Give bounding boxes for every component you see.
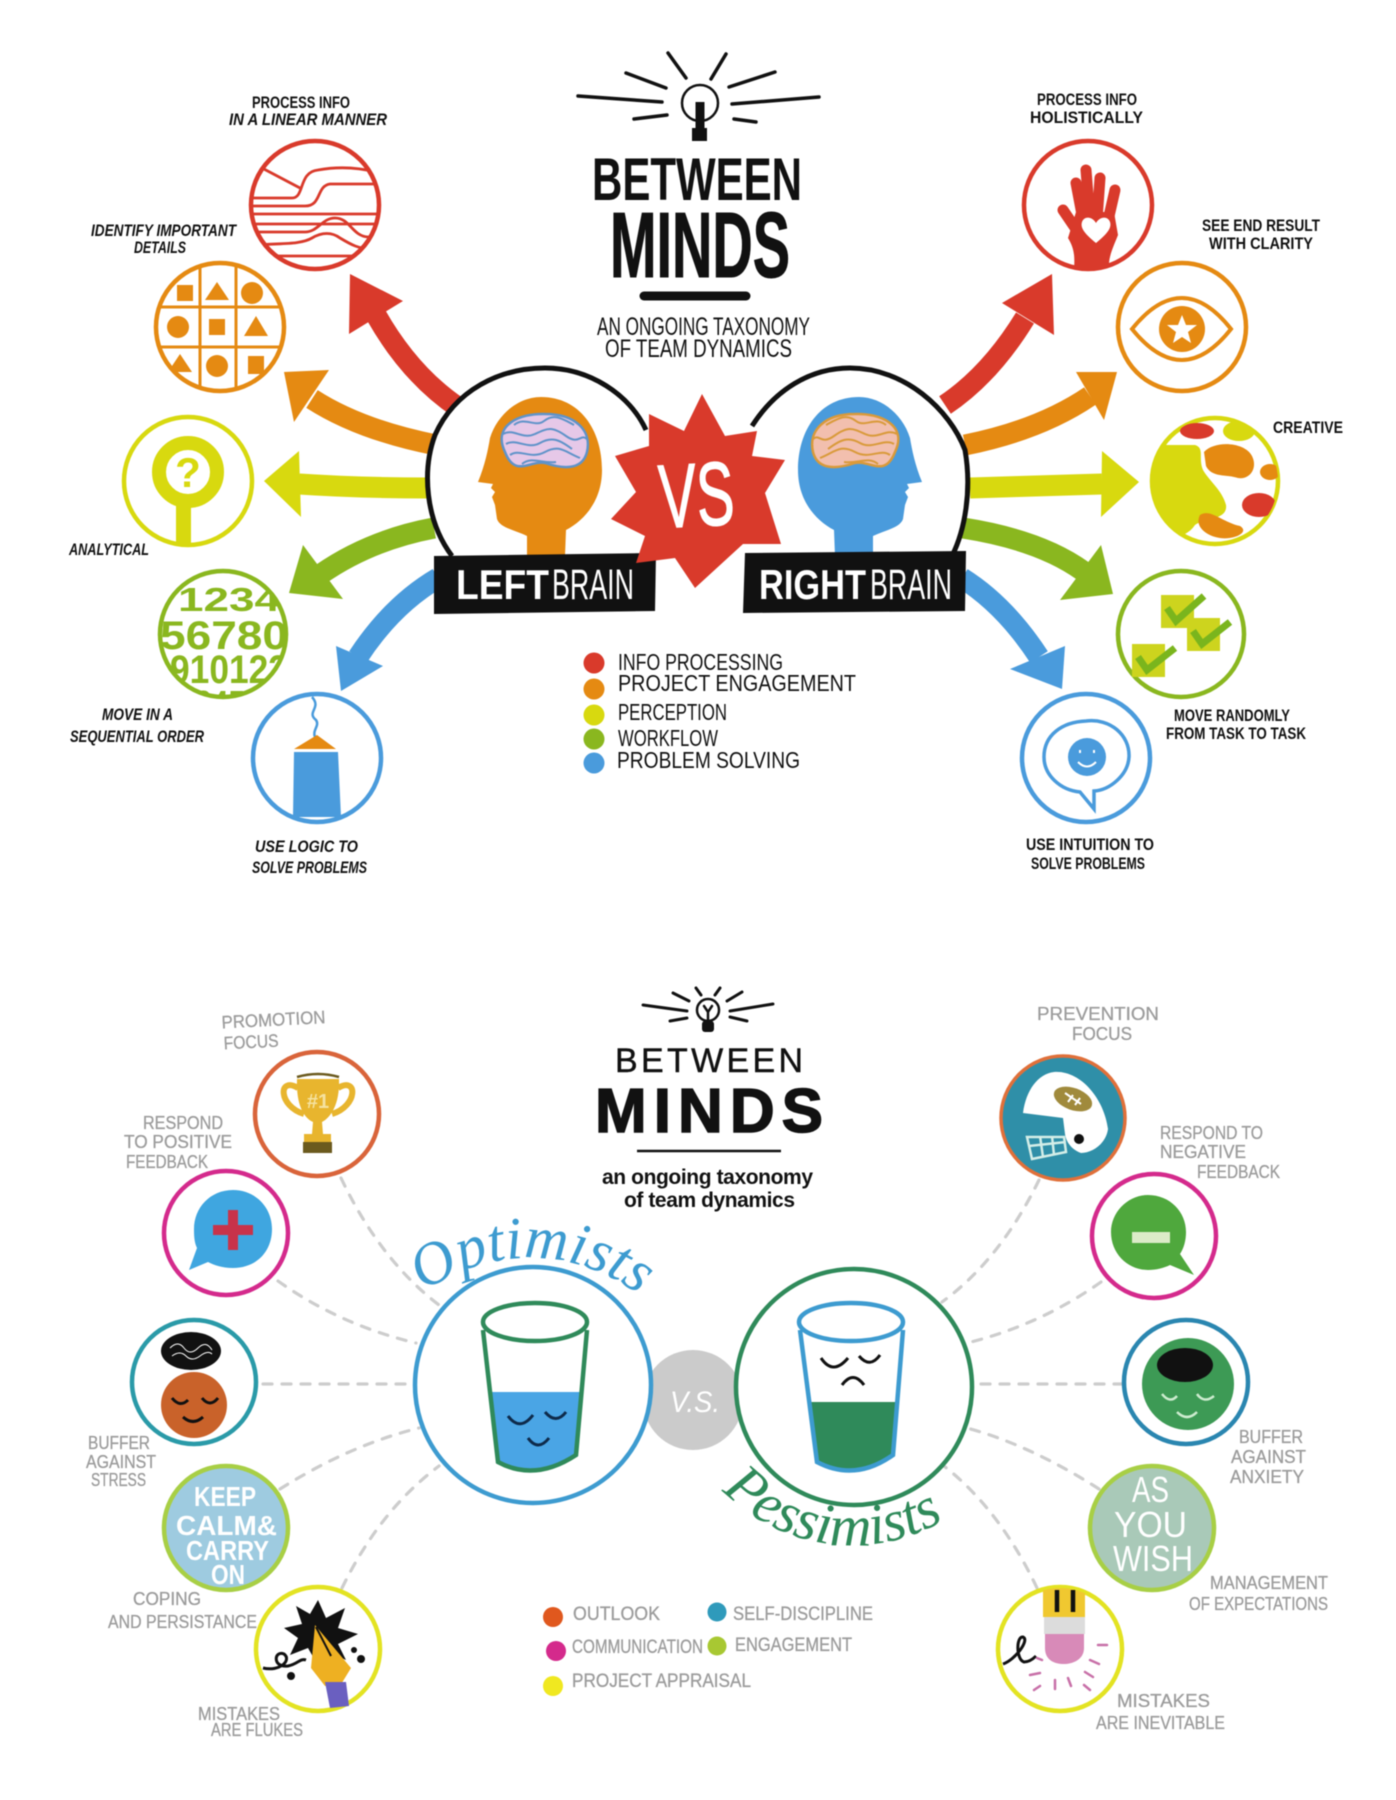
arrow: orange right	[965, 372, 1117, 445]
icon: as you wish badge: AS	[1132, 1469, 1169, 1510]
heading: BETWEEN: BETWEEN	[592, 146, 802, 213]
label: respond to positive feedback	[124, 1113, 232, 1172]
legend item: communication: COMMUNICATION	[572, 1637, 703, 1658]
legend item: project engagement	[584, 670, 856, 700]
heading: Optimists script: Optimists	[414, 1218, 654, 1291]
label: process holistically	[1030, 90, 1144, 127]
legend item: project appraisal: PROJECT APPRAISAL	[572, 1671, 751, 1692]
label: buffer against anxiety: AGAINST	[1231, 1447, 1306, 1467]
label: management of expectations: MANAGEMENT	[1210, 1573, 1328, 1593]
icon: keep calm badge: KEEP	[194, 1481, 256, 1512]
label: use logic: USE LOGIC TO	[255, 837, 358, 856]
label: see end result	[1202, 216, 1320, 253]
arrow: blue left	[336, 578, 438, 691]
legend item: engagement: ENGAGEMENT	[735, 1635, 852, 1656]
label: LEFT BRAIN	[434, 553, 656, 614]
label: mistakes are inevitable	[1096, 1691, 1225, 1733]
icon: ink pen splat	[256, 1587, 380, 1711]
subtitle: OF TEAM DYNAMICS	[605, 335, 792, 363]
legend: team categories	[543, 1602, 873, 1696]
label: mistakes are flukes: MISTAKES	[198, 1704, 280, 1724]
legend item: workflow	[584, 725, 718, 751]
subtitle: AN ONGOING TAXONOMY	[597, 313, 810, 341]
connectors: dashed lines left	[263, 1178, 439, 1588]
head silhouette: blue	[798, 397, 922, 556]
legend item: problem solving: PROBLEM SOLVING	[617, 747, 800, 773]
labels: optimist traits	[86, 1007, 327, 1740]
label: buffer against anxiety: BUFFER	[1239, 1427, 1303, 1447]
legend item: self-discipline: SELF-DISCIPLINE	[733, 1604, 873, 1625]
subtitle	[602, 1166, 813, 1212]
label: sequential order: SEQUENTIAL ORDER	[70, 727, 205, 746]
dome stroke	[428, 368, 646, 556]
icon: small light bulb with rays	[643, 988, 773, 1032]
legend item: project engagement: PROJECT ENGAGEMENT	[618, 670, 856, 696]
label: management of expectations	[1189, 1573, 1328, 1614]
arrow: green left	[289, 528, 434, 599]
label: respond to negative feedback: NEGATIVE	[1160, 1142, 1246, 1162]
V.S. circle: V.S.	[670, 1386, 720, 1419]
arrow: orange left	[284, 370, 436, 445]
icon: keep calm badge: CARRY	[186, 1535, 269, 1566]
VS starburst: VS	[656, 444, 737, 548]
label: respond to positive feedback: TO POSITIVE	[124, 1132, 232, 1152]
icon: keep calm badge: ON	[211, 1559, 245, 1590]
label: RIGHT BRAIN	[743, 551, 966, 613]
label: process info linear: IN A LINEAR MANNER	[229, 110, 388, 129]
dome outline	[752, 368, 968, 556]
icon: positive speech bubble	[164, 1171, 288, 1295]
label: use intuition	[1026, 835, 1154, 873]
label: use logic	[252, 837, 367, 877]
label: identify important details: IDENTIFY IMPORTANT	[91, 221, 237, 240]
subtitle: an ongoing taxonomy	[602, 1166, 813, 1189]
top title block: Between Minds	[578, 53, 819, 363]
legend: brain categories	[584, 649, 856, 774]
label: analytical: ANALYTICAL	[68, 540, 149, 559]
icon: check boxes (green)	[1118, 571, 1244, 697]
title underline	[644, 292, 746, 300]
label: move randomly: MOVE RANDOMLY	[1174, 706, 1290, 725]
icon: light bulb with rays	[578, 53, 819, 141]
icon: keep calm badge	[164, 1466, 288, 1590]
icon: shape grid (orange)	[150, 260, 290, 395]
label: respond to positive feedback: FEEDBACK	[126, 1152, 208, 1172]
label: buffer against stress: STRESS	[91, 1470, 146, 1490]
labels: right brain traits	[1026, 90, 1343, 873]
label: mistakes are inevitable: MISTAKES	[1117, 1691, 1210, 1711]
legend item: perception	[584, 699, 727, 726]
legend item: outlook: OUTLOOK	[573, 1604, 660, 1625]
label: identify important details	[91, 221, 237, 257]
label: buffer against anxiety	[1230, 1427, 1306, 1487]
brain: lilac	[502, 414, 588, 467]
icon: trophy	[255, 1052, 379, 1176]
label: management of expectations: OF EXPECTATIONS	[1189, 1594, 1328, 1614]
legend item: workflow: WORKFLOW	[618, 725, 718, 751]
label: buffer against stress: BUFFER	[88, 1433, 150, 1453]
label: coping and persistance: AND PERSISTANCE	[108, 1612, 257, 1632]
right brain panel	[752, 368, 968, 556]
icon: numbers (green): 56780	[160, 614, 288, 658]
subtitle: of team dynamics	[624, 1189, 795, 1212]
label: respond to positive feedback: RESPOND	[143, 1113, 223, 1133]
optimists panel	[412, 1218, 654, 1506]
label: promotion focus: PROMOTION	[221, 1007, 326, 1033]
label: respond to negative feedback: FEEDBACK	[1197, 1162, 1280, 1182]
icon: negative speech bubble	[1092, 1174, 1216, 1298]
icon: question magnifier (yellow)	[124, 417, 252, 545]
icon: hand with heart (red)	[1024, 141, 1152, 270]
icon: eye with star (orange)	[1118, 263, 1246, 391]
label: RIGHT BRAIN: BRAIN	[870, 561, 952, 609]
left brain panel	[428, 368, 656, 614]
title underline	[637, 1150, 781, 1152]
arrow: yellow right	[970, 451, 1139, 517]
label: sequential order	[70, 705, 205, 746]
icon: as you wish badge	[1090, 1466, 1214, 1590]
label: see end result: WITH CLARITY	[1209, 234, 1314, 253]
heading: Pessimists script: Pessimists	[720, 1465, 940, 1546]
brain: peach	[812, 414, 898, 467]
icon: calm face with scribble	[132, 1320, 256, 1444]
label: LEFT BRAIN: LEFT	[456, 561, 549, 608]
label: identify important details: DETAILS	[134, 238, 186, 257]
label: process info linear: PROCESS INFO	[252, 93, 350, 112]
labels: left brain traits	[68, 93, 388, 877]
label: process info linear	[229, 93, 388, 129]
arrow: red right	[945, 274, 1054, 405]
icon: as you wish badge: WISH	[1113, 1538, 1193, 1579]
glass half full	[483, 1303, 587, 1471]
arrow: red left	[349, 274, 459, 408]
label: buffer against stress: AGAINST	[86, 1452, 156, 1472]
label: sequential order: MOVE IN A	[102, 705, 173, 724]
heading: MINDS: MINDS	[595, 1077, 823, 1146]
glass half empty	[799, 1303, 903, 1471]
heading: MINDS: MINDS	[610, 193, 790, 297]
heading: BETWEEN: BETWEEN	[615, 1042, 803, 1080]
icon: question magnifier (yellow): ?	[175, 449, 201, 496]
legend item: info processing	[584, 649, 783, 675]
label: promotion focus	[221, 1007, 327, 1053]
label: move randomly: FROM TASK TO TASK	[1166, 724, 1307, 743]
icon: numbers (green): 910123	[170, 648, 288, 692]
label: process holistically: PROCESS INFO	[1037, 90, 1137, 109]
icon: football helmet	[1001, 1056, 1125, 1180]
label: respond to negative feedback	[1160, 1123, 1280, 1182]
arrow: blue right	[962, 578, 1065, 689]
dome outline	[428, 368, 646, 556]
label: coping and persistance	[108, 1589, 257, 1632]
arrow: green right	[963, 528, 1113, 600]
arrows: left brain	[264, 274, 459, 691]
pessimists panel	[720, 1266, 976, 1546]
legend item: outlook	[543, 1604, 660, 1627]
subtitle	[597, 313, 810, 363]
label: prevention focus: PREVENTION	[1037, 1004, 1159, 1024]
label: LEFT BRAIN: BRAIN	[552, 561, 634, 609]
labels: pessimist traits	[1037, 1004, 1328, 1733]
VS starburst	[611, 394, 785, 588]
label: prevention focus: FOCUS	[1072, 1024, 1132, 1044]
label: see end result: SEE END RESULT	[1202, 216, 1320, 235]
icon: trophy: #1	[307, 1091, 329, 1113]
legend item: info processing: INFO PROCESSING	[618, 649, 783, 675]
label: process holistically: HOLISTICALLY	[1030, 108, 1144, 127]
label: use logic: SOLVE PROBLEMS	[252, 858, 367, 877]
icon: keep calm badge: CALM&	[176, 1510, 277, 1541]
icon: as you wish badge: YOU	[1114, 1504, 1187, 1545]
label: mistakes are inevitable: ARE INEVITABLE	[1096, 1713, 1225, 1733]
label: RIGHT BRAIN: RIGHT	[759, 561, 866, 608]
label: mistakes are flukes: ARE FLUKES	[211, 1720, 303, 1740]
dome stroke	[752, 368, 968, 556]
label: move randomly	[1166, 706, 1307, 743]
legend item: communication	[546, 1637, 703, 1661]
icon: smiley speech bubble (blue)	[1022, 694, 1150, 822]
arrow: yellow left	[264, 451, 430, 517]
connectors: dashed lines right	[942, 1180, 1123, 1588]
legend item: project appraisal	[543, 1671, 751, 1696]
V.S. circle	[643, 1350, 743, 1450]
pessimists circle	[736, 1269, 972, 1505]
icon: numbers (green): 345	[195, 683, 245, 724]
label: promotion focus: FOCUS	[223, 1031, 279, 1053]
icon: numbers (green)	[156, 568, 290, 700]
arrows: right brain	[945, 274, 1139, 689]
label: prevention focus	[1037, 1004, 1159, 1044]
optimists circle	[415, 1267, 651, 1503]
head silhouette: orange	[478, 397, 602, 556]
icon: pencil eraser	[998, 1585, 1122, 1711]
label: mistakes are flukes	[198, 1704, 303, 1740]
label: use intuition: SOLVE PROBLEMS	[1031, 854, 1145, 873]
icon: abstract blobs (yellow)	[1148, 418, 1280, 544]
label: coping and persistance: COPING	[133, 1589, 201, 1609]
bottom title block: Between Minds	[595, 988, 823, 1212]
icon: linear lines (red)	[248, 141, 382, 269]
label: use intuition: USE INTUITION TO	[1026, 835, 1154, 854]
icon: numbers (green): 1234	[178, 581, 281, 618]
label: buffer against anxiety: ANXIETY	[1230, 1467, 1304, 1487]
icon: pencil (blue)	[253, 694, 381, 822]
legend item: perception: PERCEPTION	[618, 699, 727, 725]
label: respond to negative feedback: RESPOND TO	[1160, 1123, 1263, 1143]
label: buffer against stress	[86, 1433, 156, 1490]
icon: green face with scribble	[1124, 1320, 1248, 1444]
label: creative: CREATIVE	[1273, 418, 1343, 437]
